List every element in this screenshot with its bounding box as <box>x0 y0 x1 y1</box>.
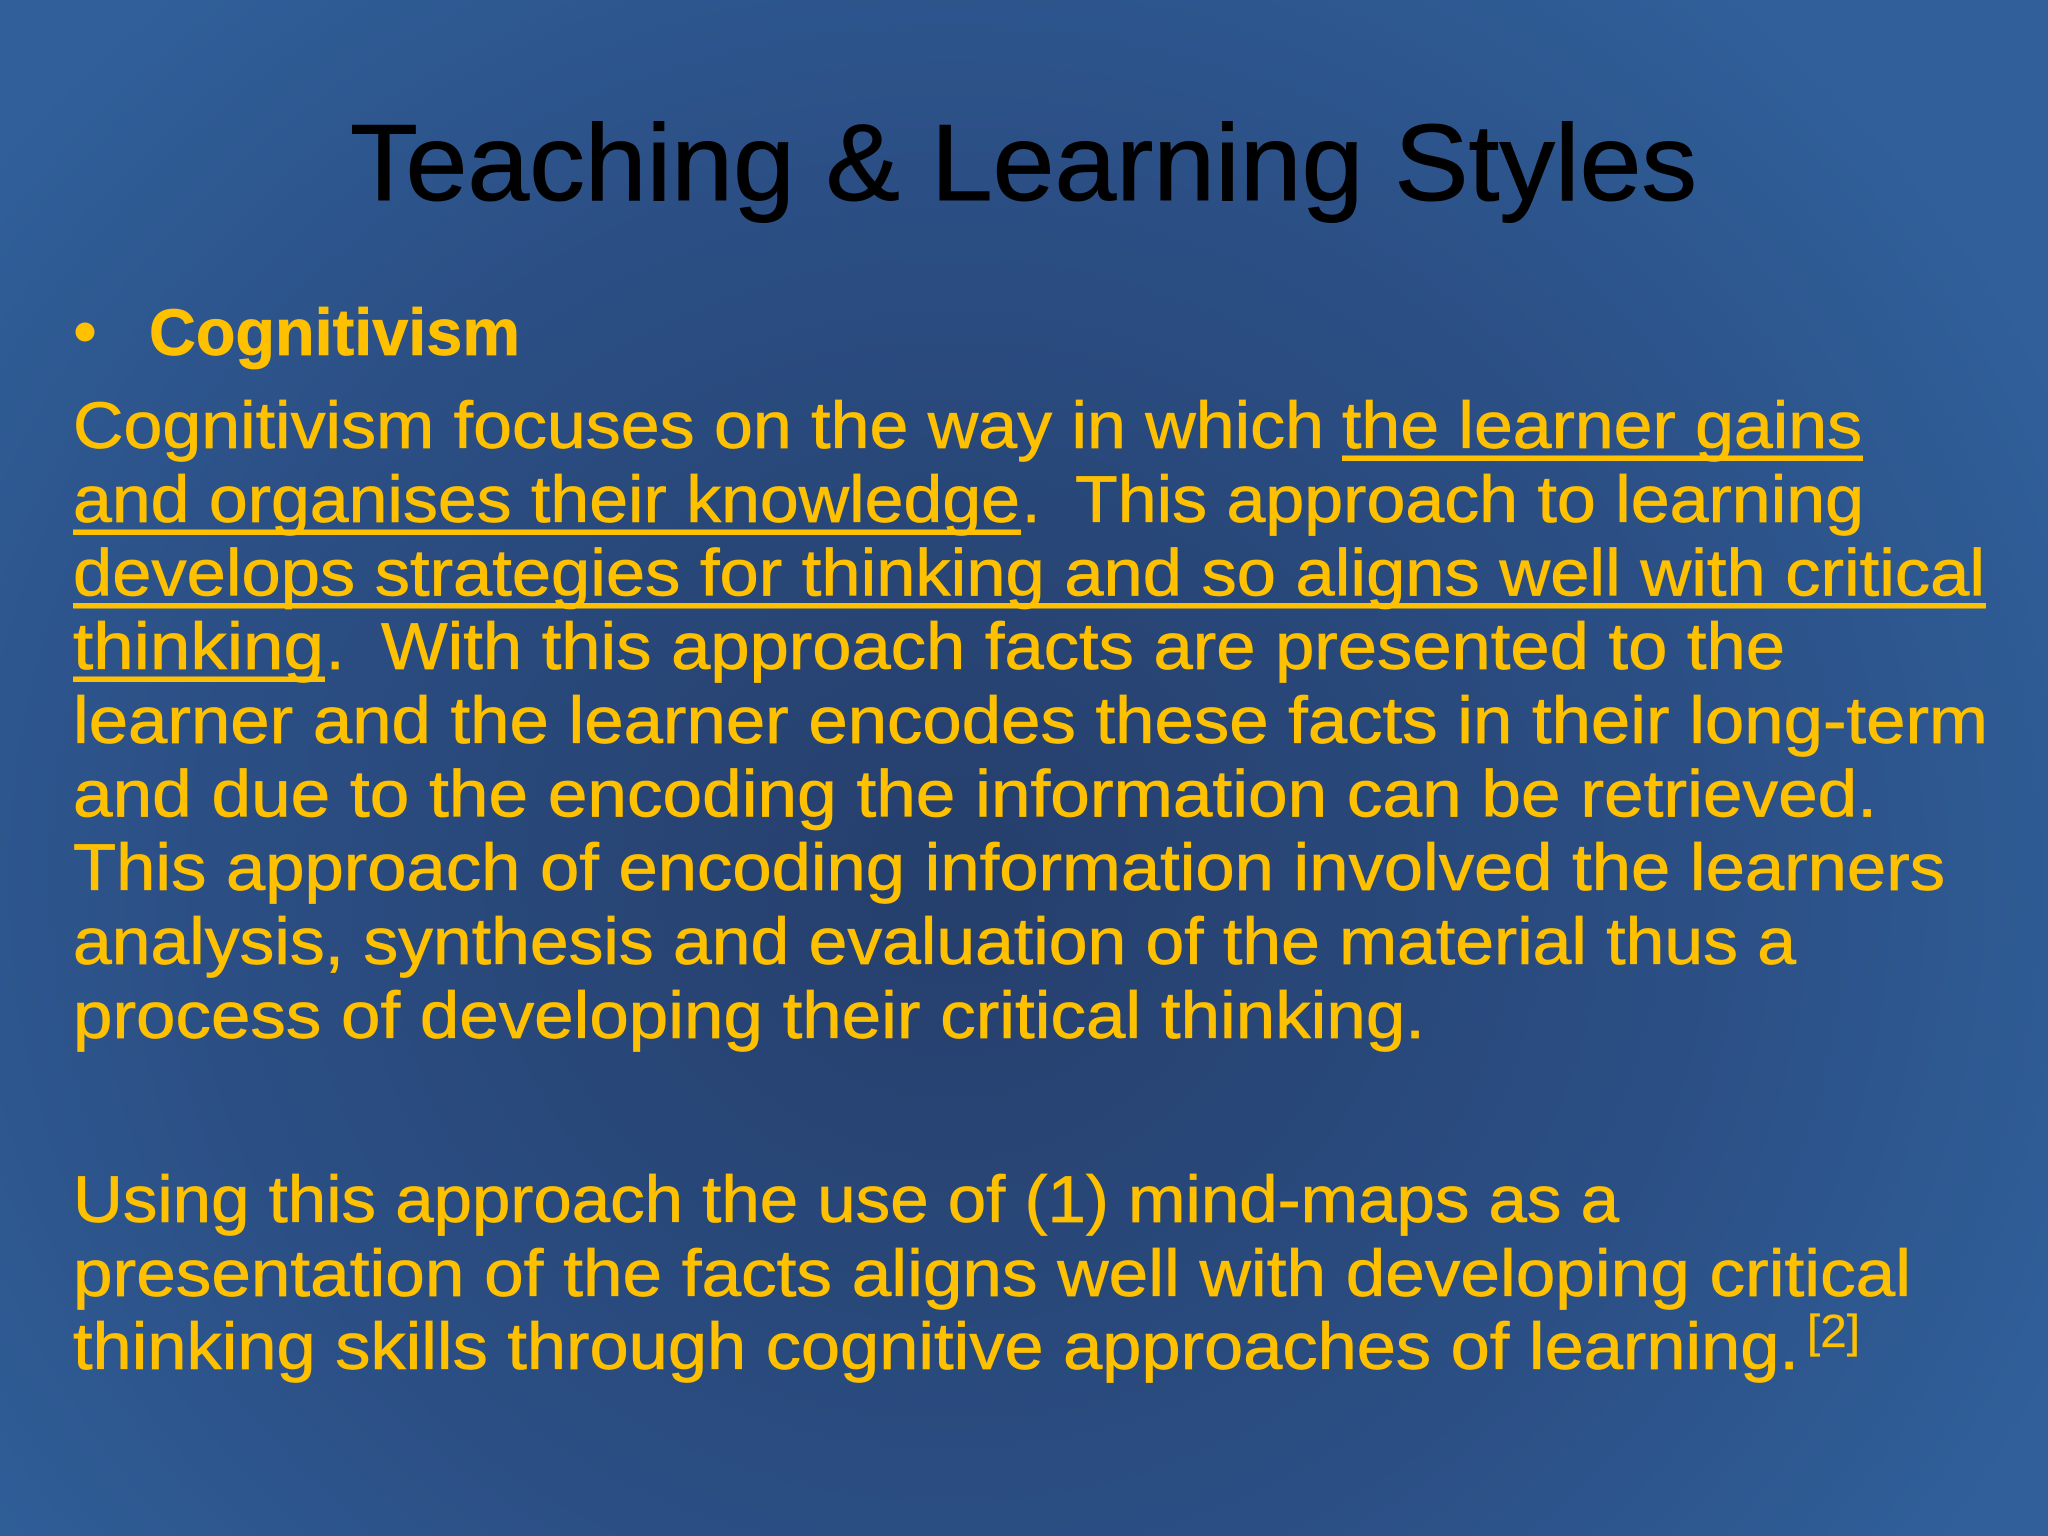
text block: cognitivism paragraph: the learner gains <box>1342 388 1862 462</box>
text block: cognitivism paragraph: analysis, synthesis and evaluation of the material thus a <box>73 904 1796 978</box>
text block: cognitivism paragraph: process of developing their critical thinking. <box>73 978 1425 1052</box>
text block: cognitivism paragraph: and organises their knowledge <box>73 462 1020 536</box>
text block: mind-maps paragraph: thinking skills through cognitive approaches of learning. <box>73 1309 1799 1383</box>
text block: mind-maps paragraph: [2] <box>1807 1305 1860 1357</box>
bullet heading: Cognitivism: Cognitivism <box>149 295 520 369</box>
text block: cognitivism paragraph: and due to the encoding the information can be retrieved. <box>73 756 1877 830</box>
text block: mind-maps paragraph: presentation of the facts aligns well with developing critical <box>73 1236 1911 1310</box>
text block: mind-maps paragraph <box>73 1162 1911 1383</box>
text block: cognitivism paragraph: This approach of encoding information involved the learners <box>73 830 1945 904</box>
text block: mind-maps paragraph: Using this approach the use of (1) mind-maps as a <box>73 1162 1619 1236</box>
text block: cognitivism paragraph: thinking <box>73 609 324 683</box>
title: Teaching & Learning Styles <box>350 102 1697 224</box>
text block: cognitivism paragraph: learner and the learner encodes these facts in their long-term <box>73 683 1988 757</box>
text block: cognitivism paragraph: develops strategies for thinking and so aligns well with critical <box>73 536 1985 610</box>
text block: cognitivism paragraph <box>73 388 1988 1052</box>
text block: cognitivism paragraph: . <box>1022 462 1040 536</box>
text block: cognitivism paragraph: Cognitivism focuses on the way in which <box>73 388 1324 462</box>
text block: cognitivism paragraph: . <box>326 609 344 683</box>
text block: cognitivism paragraph: This approach to learning <box>1075 462 1864 536</box>
text block: cognitivism paragraph: With this approach facts are presented to the <box>381 609 1785 683</box>
